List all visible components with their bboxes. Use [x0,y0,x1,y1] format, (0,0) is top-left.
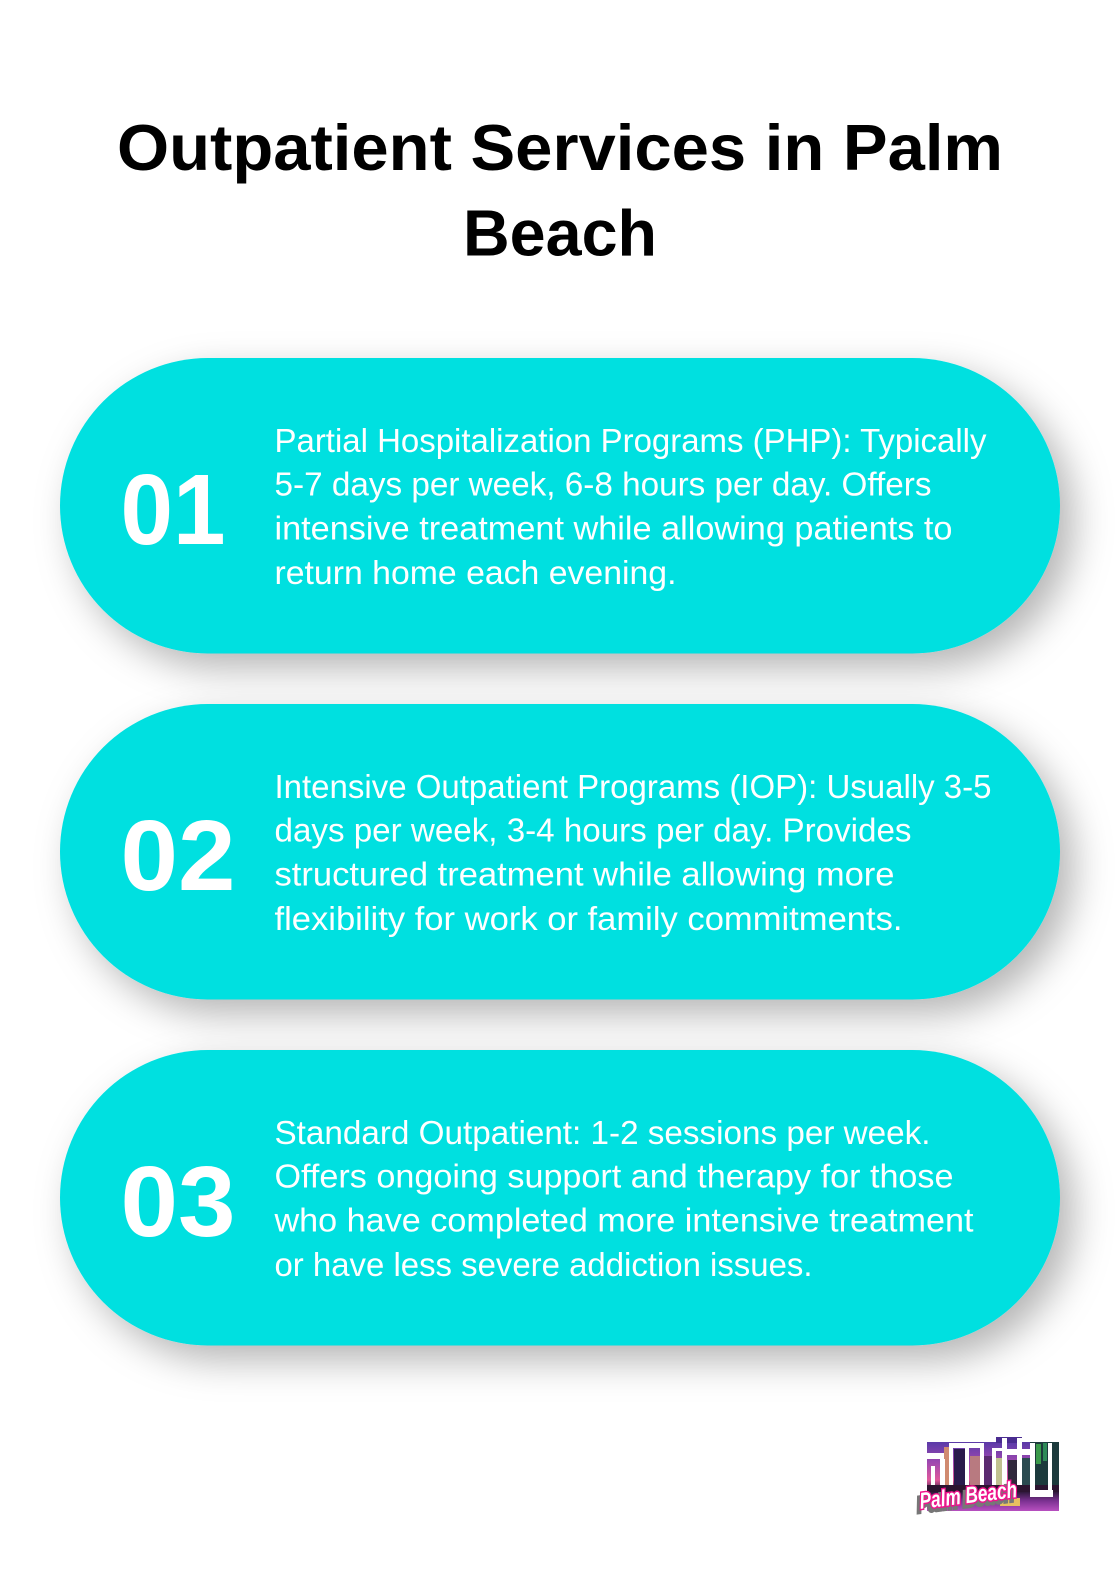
description: standard outpatient: or have less severe addiction issues. [274,1246,812,1283]
panel: partial hospitalization programs [60,358,1060,654]
logo lettering: amity [927,1438,1053,1497]
logo: Amity Palm Beach [915,1437,1059,1518]
description: IOP [274,768,992,937]
description: IOP: structured treatment while allowing more [274,856,894,893]
logo script shadow: Palm Beach [915,1480,1015,1518]
description: standard outpatient: Standard Outpatient: 1-2 sessions per week. [274,1114,930,1151]
logo script: Palm Beach: Palm Beach [918,1476,1018,1514]
description: PHP: intensive treatment while allowing patients to [274,510,952,547]
title: Outpatient Services in Palm [117,111,1003,184]
number 02: 02 [120,800,236,912]
description: standard outpatient [273,1114,973,1283]
title [117,111,1003,270]
title: Beach [463,196,657,270]
description: standard outpatient: Offers ongoing support and therapy for those [274,1158,954,1195]
description: PHP: 5-7 days per week, 6-8 hours per day. Offers [274,466,932,503]
description: PHP: Partial Hospitalization Programs (PHP): Typically [274,422,987,459]
description: PHP [274,422,987,591]
panel: intensive outpatient programs [60,704,1060,1000]
description: IOP: flexibility for work or family commitments. [274,900,902,937]
description: IOP: days per week, 3-4 hours per day. Provides [274,812,912,849]
description: standard outpatient: who have completed more intensive treatment [273,1202,973,1239]
description: PHP: return home each evening. [274,554,676,591]
description: IOP: Intensive Outpatient Programs (IOP): Usually 3-5 [274,768,992,805]
number 01: 01 [120,454,226,566]
panel: standard outpatient [60,1050,1060,1346]
number 03: 03 [120,1146,236,1258]
